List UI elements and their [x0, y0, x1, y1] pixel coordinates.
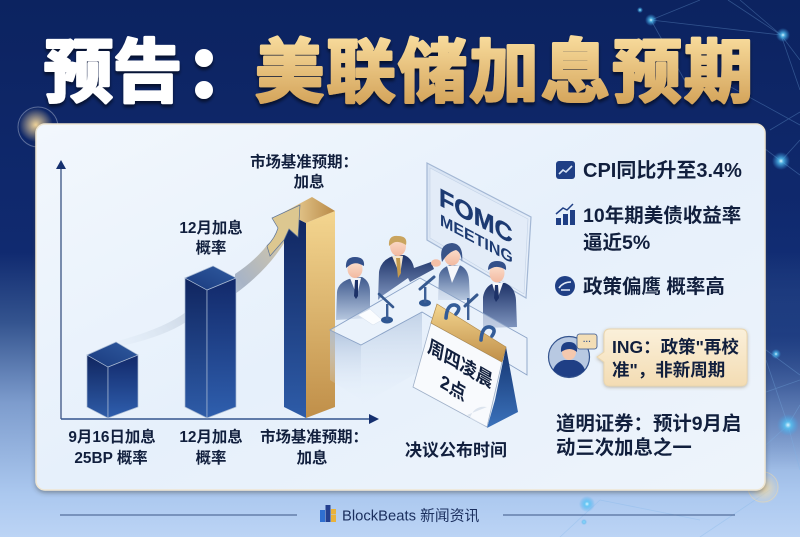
footer text: BlockBeats 新闻资讯 — [342, 508, 480, 524]
icon: desk calendar: 2点 — [439, 370, 468, 405]
person 3 — [438, 243, 470, 300]
panel: main card — [36, 124, 765, 490]
item: hawkish policy: 政策偏鹰 概率高 — [583, 275, 725, 298]
label: market expectation top: 市场基准预期： — [250, 152, 358, 171]
bar: market baseline — [284, 197, 335, 418]
label: December axis: 概率 — [196, 448, 226, 467]
icon: desk calendar: 周四凌晨 — [426, 335, 495, 393]
person 1 — [336, 257, 370, 320]
label: December axis — [179, 427, 243, 467]
table: glass desk — [330, 278, 527, 405]
label: market axis: 加息 — [297, 448, 327, 467]
icon: BlockBeats logo — [320, 505, 336, 522]
bar: December — [185, 266, 236, 418]
speech bubble: ING：政策"再校 — [612, 337, 739, 357]
network decoration — [560, 0, 800, 537]
text: Daiwa forecast: 道明证券：预计9月启 — [556, 412, 741, 435]
sign: FOMC board: MEETING — [440, 211, 513, 267]
label: December top — [179, 218, 243, 257]
title: white part: 预告 — [44, 34, 182, 111]
arrow head over bar — [267, 205, 300, 256]
microphone centre — [419, 277, 434, 306]
glow: top-left ring — [18, 107, 58, 147]
person 2 — [378, 236, 441, 300]
item: treasury yield: 10年期美债收益率 — [583, 204, 741, 227]
label: December top: 概率 — [196, 238, 226, 257]
microphone left — [379, 294, 393, 324]
footer — [60, 505, 735, 524]
sign: FOMC board — [427, 163, 531, 298]
speech bubble — [597, 329, 747, 386]
person 4 — [483, 261, 517, 328]
label: September axis — [68, 427, 156, 467]
label: December axis: 12月加息 — [179, 427, 243, 446]
chart: rising bars — [56, 152, 379, 467]
label: market expectation top: 加息 — [294, 172, 324, 191]
x axis — [61, 414, 379, 424]
bar: September — [87, 342, 138, 418]
label: market expectation top — [250, 152, 358, 191]
illustration: FOMC meeting — [330, 163, 531, 460]
icon: desk calendar — [413, 304, 518, 428]
icon: trend chart — [556, 161, 575, 179]
label: decision time: 决议公布时间 — [405, 441, 507, 460]
label: market axis — [260, 427, 368, 467]
icon: analyst avatar — [548, 334, 597, 378]
text: Daiwa forecast — [556, 412, 741, 459]
label: September axis: 25BP 概率 — [74, 448, 148, 467]
item: treasury yield — [556, 204, 741, 254]
icon: rising bars — [556, 204, 575, 225]
microphone right — [465, 295, 477, 320]
sign: FOMC board: FOMC — [439, 183, 513, 250]
title: colon — [195, 49, 213, 99]
label: December top: 12月加息 — [179, 218, 243, 237]
speech bubble: 准"，非新周期 — [612, 360, 725, 380]
label: market axis: 市场基准预期： — [260, 427, 368, 446]
glow: bottom-right ring — [748, 472, 780, 504]
item: treasury yield: 逼近5% — [583, 232, 650, 254]
text: Daiwa forecast: 动三次加息之一 — [556, 436, 692, 459]
item: CPI: CPI同比升至3.4% — [583, 159, 742, 182]
title: gold part: 美联储加息预期 — [255, 34, 753, 111]
icon: analyst avatar: ··· — [583, 337, 591, 346]
title — [44, 34, 753, 111]
label: September axis: 9月16日加息 — [68, 427, 156, 446]
arrow: rising trend tail — [118, 240, 286, 346]
callout: ING — [548, 329, 747, 386]
panel: key points — [548, 159, 747, 459]
icon: hawk badge — [555, 276, 575, 296]
y axis — [56, 160, 66, 419]
